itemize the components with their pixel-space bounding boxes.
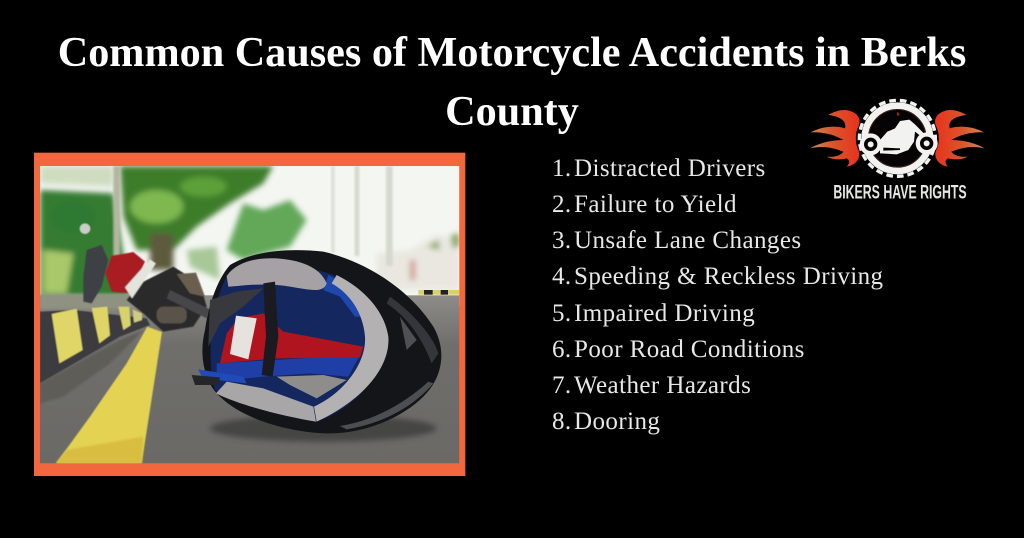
gray padding: [227, 258, 327, 290]
yellow road line: [56, 327, 162, 463]
item 2: 2.: [552, 191, 572, 218]
item 5: 5.: [552, 300, 572, 327]
title: County: [445, 88, 579, 135]
item 2: Failure to Yield: [574, 191, 737, 218]
helmet: [192, 250, 441, 442]
photo frame: [34, 153, 465, 476]
helmet shadow: [210, 415, 437, 442]
icon: left flames: [810, 110, 860, 167]
item 8: 8.: [552, 408, 572, 435]
photo: fallen helmet and motorcycle on road: [34, 152, 466, 476]
item 4: 4.: [552, 263, 572, 290]
item 1: 1.: [552, 155, 572, 182]
item 4: Speeding & Reckless Driving: [574, 263, 884, 290]
item 8: Dooring: [574, 408, 660, 435]
helmet shell: [202, 250, 441, 433]
sky: [40, 166, 459, 306]
item 6: Poor Road Conditions: [574, 336, 805, 363]
white label: [230, 316, 257, 359]
chin strap: [262, 282, 278, 377]
item 7: Weather Hazards: [574, 372, 751, 399]
item 5: Impaired Driving: [574, 300, 755, 327]
icon: gear with motorcycle: [859, 100, 938, 176]
curb: [40, 307, 150, 383]
icon: right flames: [935, 110, 985, 167]
red liner: [220, 313, 363, 363]
helmet interior: [211, 267, 383, 422]
item 6: 6.: [552, 336, 572, 363]
item 7: 7.: [552, 372, 572, 399]
icon: gear with motorcycle: ♞: [896, 112, 900, 118]
blue liner: [323, 275, 363, 317]
list of causes: [552, 155, 884, 435]
motorcycle: [860, 133, 882, 155]
fallen motorcycle: [80, 223, 210, 332]
item 3: Unsafe Lane Changes: [574, 227, 802, 254]
title: Common Causes of Motorcycle Accidents in Berks: [58, 29, 966, 76]
road: [40, 295, 459, 463]
background trees: [40, 166, 459, 297]
item 1: Distracted Drivers: [574, 155, 766, 182]
title: [58, 29, 966, 135]
item 3: 3.: [552, 227, 572, 254]
